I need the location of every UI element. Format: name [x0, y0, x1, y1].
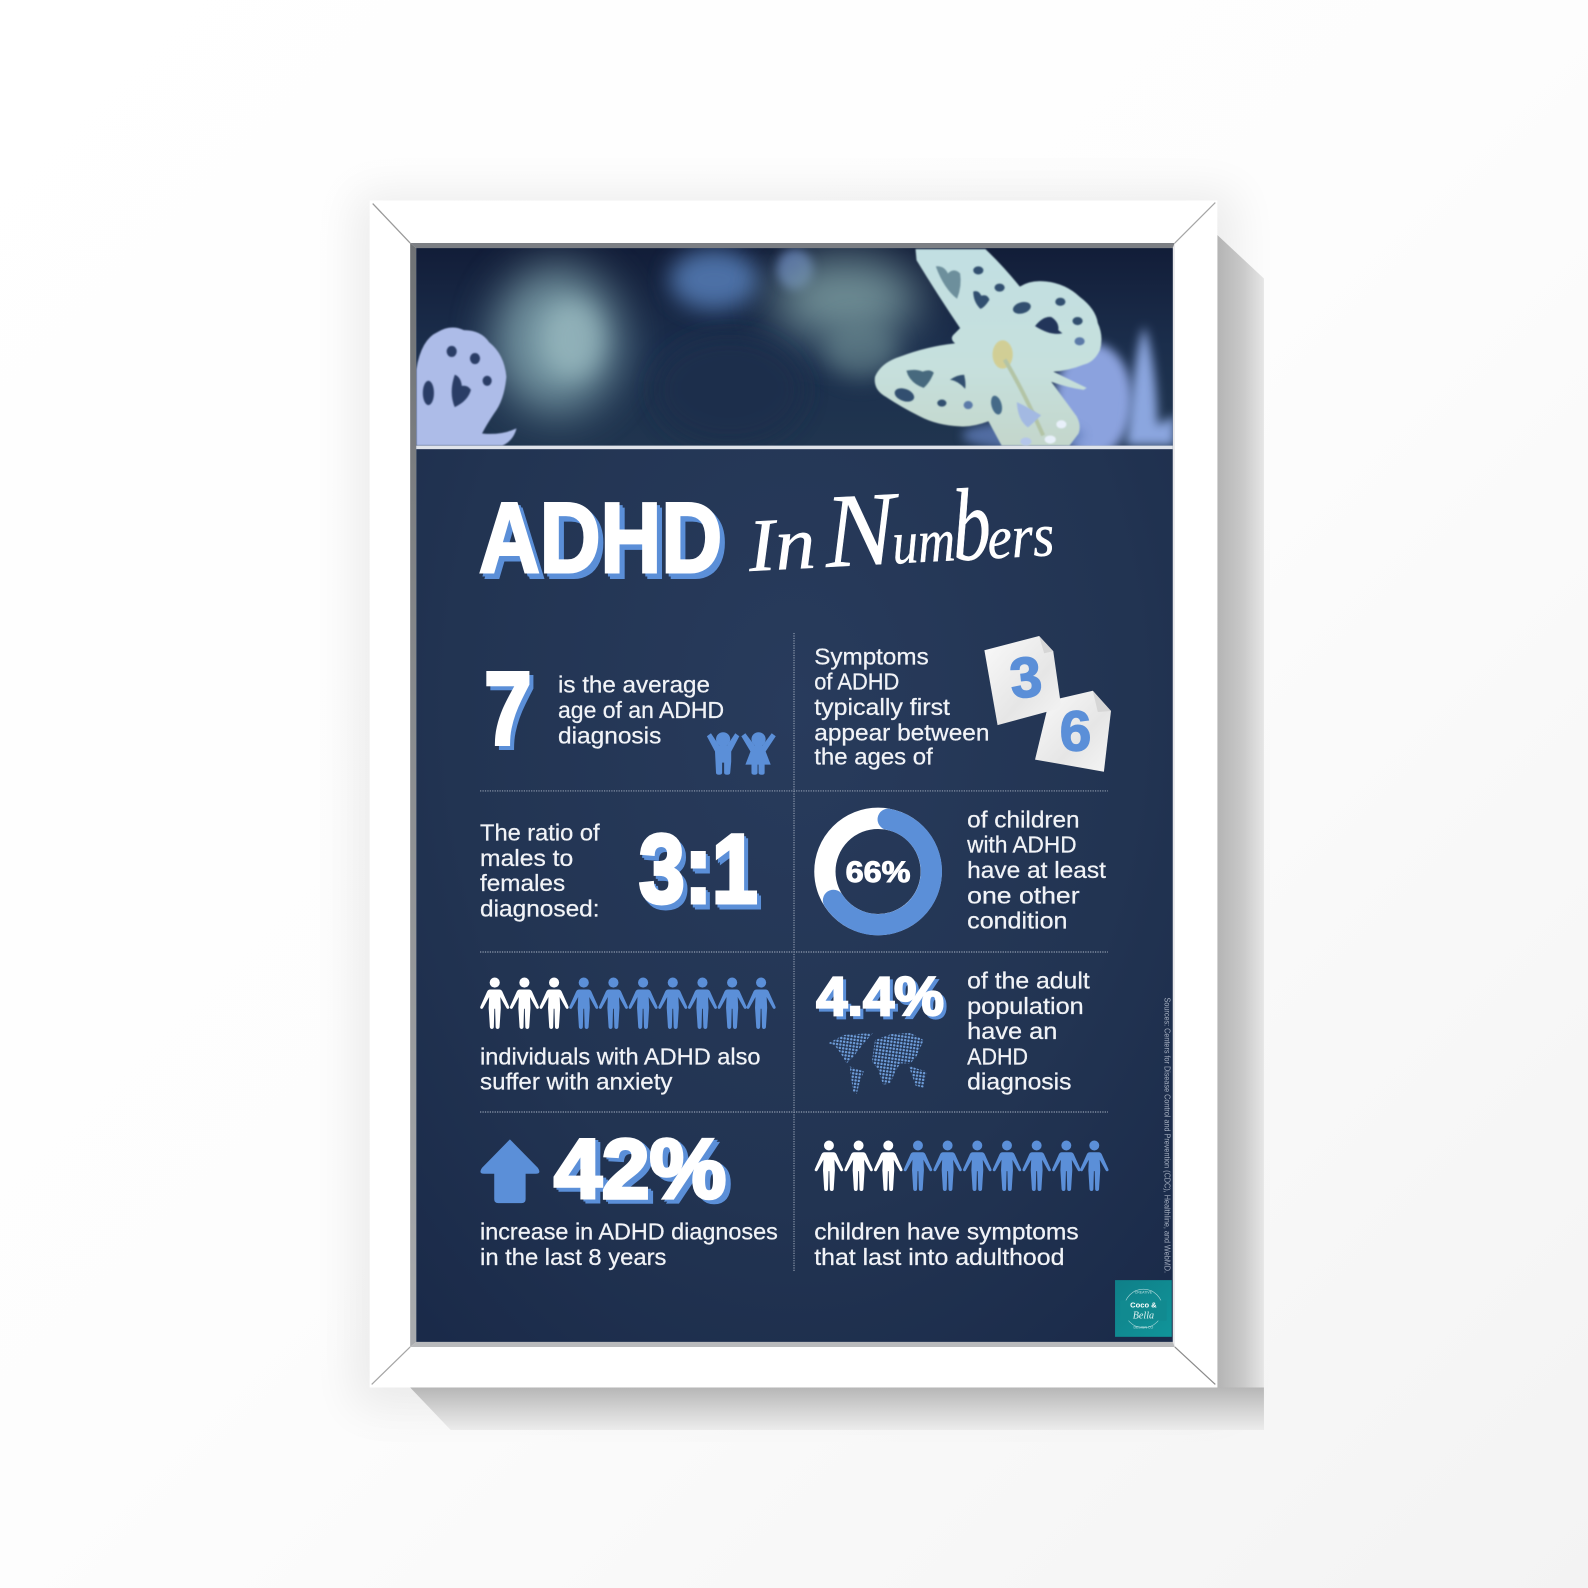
- donut chart: 66%: [846, 856, 910, 889]
- text: adult population: [967, 967, 1090, 1095]
- logo: Coco and Bella: Coco &: [1130, 1300, 1157, 1309]
- stat: ratio 3:1: [480, 814, 762, 928]
- title: ADHD: ADHD: [479, 483, 722, 594]
- frame shadow: [354, 192, 1264, 1430]
- text: ratio: males to: [480, 845, 573, 871]
- text: symptoms: the ages of: [814, 744, 933, 770]
- text: adult population: of the adult: [967, 967, 1090, 993]
- text: average age: diagnosis: [558, 722, 661, 748]
- text: adulthood: children have symptoms: [814, 1219, 1079, 1245]
- title: ADHD: ADHD: [482, 486, 725, 597]
- text: adulthood: [814, 1219, 1079, 1270]
- number 42%: 42%: [554, 1122, 726, 1216]
- number 4.4%: 4.4%: [819, 968, 947, 1030]
- title: In Numbers: um: [890, 507, 957, 577]
- text: ratio: females: [480, 870, 565, 896]
- stat: anxiety pictogram: [480, 978, 776, 1095]
- text: adult population: ADHD: [967, 1043, 1028, 1069]
- text: symptoms: appear between: [814, 719, 989, 745]
- stat: symptoms ages 3 to 6: [814, 636, 1111, 772]
- stat: 66% donut: [825, 806, 1106, 934]
- blurred background shapes: [494, 249, 1175, 457]
- logo: Coco and Bella: Bella: [1133, 1311, 1154, 1322]
- text: average age: is the average: [558, 672, 710, 698]
- number 3:1: 3:1: [643, 819, 762, 928]
- text: increase: in the last 8 years: [480, 1244, 666, 1270]
- number 3:1: 3:1: [641, 817, 760, 926]
- logo: Coco and Bella: DESIGN CO: [1133, 1326, 1154, 1330]
- text: symptoms: typically first: [814, 694, 951, 720]
- icon: paper 6: 6: [1060, 700, 1091, 763]
- text: increase: [480, 1219, 778, 1270]
- text: other condition: condition: [967, 908, 1067, 934]
- text: anxiety: individuals with ADHD also: [480, 1043, 761, 1069]
- text: increase: increase in ADHD diagnoses: [480, 1219, 778, 1245]
- number 7: 7: [488, 655, 536, 771]
- stat: children into adulthood: [814, 1141, 1109, 1270]
- text: other condition: of children: [967, 806, 1080, 832]
- logo: Coco and Bella: CREATIVE: [1135, 1290, 1153, 1294]
- title: [479, 461, 1056, 599]
- text: symptoms: of ADHD: [814, 669, 899, 695]
- text: anxiety: suffer with anxiety: [480, 1069, 673, 1095]
- title: In Numbers: In: [745, 502, 817, 588]
- logo: Coco and Bella: [1115, 1280, 1172, 1337]
- text: ratio: diagnosed:: [480, 896, 600, 922]
- text: adult population: population: [967, 993, 1084, 1019]
- text: average age: age of an ADHD: [558, 697, 724, 723]
- stat: 4.4% adults: [816, 965, 1090, 1095]
- text: ratio: [480, 820, 600, 922]
- grid dividers: [480, 633, 1108, 1271]
- text: average age: [558, 672, 724, 748]
- icon: paper 6: [1035, 691, 1111, 772]
- text: anxiety: [480, 1043, 761, 1095]
- text: other condition: with ADHD: [966, 832, 1077, 858]
- icon: up arrow: [480, 1139, 539, 1203]
- stat: average age 7: [484, 651, 776, 775]
- donut chart: [825, 818, 931, 925]
- number 42%: 42%: [559, 1126, 731, 1220]
- title: In Numbers: b: [949, 467, 994, 583]
- text: other condition: [966, 806, 1106, 934]
- icon: paper 3: 3: [1007, 645, 1045, 711]
- text: other condition: one other: [967, 882, 1080, 908]
- banner divider line: [416, 446, 1173, 449]
- icon: two children: [707, 732, 776, 775]
- text: adult population: have an: [967, 1018, 1057, 1044]
- pictogram: 3 of 10 people: [815, 1141, 1109, 1191]
- title: In Numbers: N: [821, 469, 904, 590]
- stat: 42% increase: [480, 1122, 778, 1270]
- icon: dotted world map: [828, 1033, 927, 1094]
- number 3:1: 3:1: [639, 814, 758, 923]
- sources note: Sources: Centers for Disease Control and Prevention (CDC), Healthline, and WebMD.: [1163, 998, 1172, 1273]
- white picture frame: [370, 201, 1217, 1387]
- title: In Numbers: ers: [986, 502, 1056, 573]
- pictogram: 3 of 10 people: [480, 978, 776, 1029]
- icon: paper 3: [984, 636, 1061, 725]
- banner photo: paper butterflies: [416, 248, 1175, 457]
- left butterfly: [416, 328, 517, 446]
- text: symptoms: [814, 643, 989, 770]
- text: other condition: have at least: [967, 857, 1106, 883]
- text: adulthood: that last into adulthood: [814, 1244, 1064, 1270]
- text: adult population: diagnosis: [967, 1069, 1071, 1095]
- number 7: 7: [484, 651, 532, 767]
- text: symptoms: Symptoms: [814, 643, 929, 669]
- number 42%: 42%: [557, 1124, 729, 1218]
- poster background: [416, 248, 1173, 1342]
- title: ADHD: ADHD: [484, 488, 727, 599]
- right butterfly: [875, 249, 1101, 446]
- text: ratio: The ratio of: [480, 820, 600, 846]
- number 4.4%: 4.4%: [816, 965, 944, 1027]
